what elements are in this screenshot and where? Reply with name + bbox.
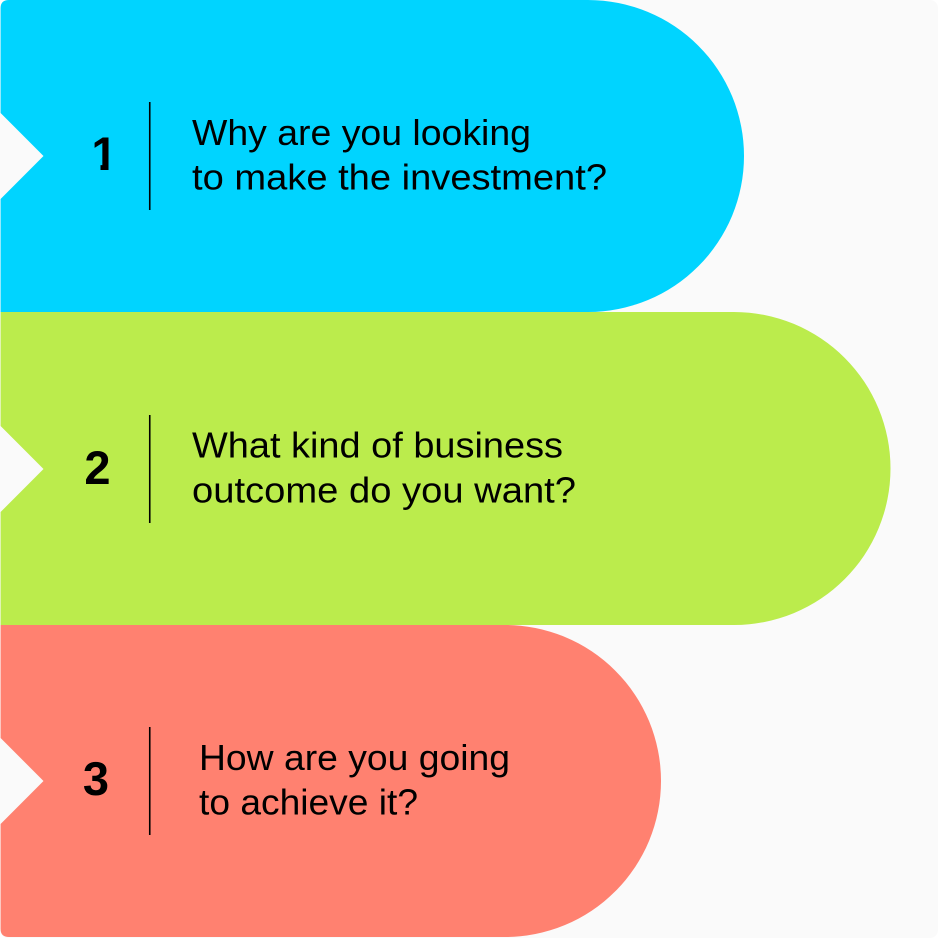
question 1: [192, 112, 607, 198]
coral band with notch: [1, 625, 661, 937]
question 2: What kind of business: [192, 424, 563, 466]
number 3: 3: [83, 752, 109, 805]
question 2: outcome do you want?: [192, 470, 576, 510]
panel: step 2: [1, 312, 891, 625]
panel: step 3: [1, 625, 661, 937]
question 1: to make the investment?: [192, 156, 607, 198]
panel: step 1: [1, 0, 744, 312]
question 3: to achieve it?: [199, 782, 418, 822]
number 2: 2: [84, 441, 111, 494]
question 3: How are you going: [199, 737, 510, 778]
question 3: [199, 737, 510, 822]
blue band with notch: [1, 0, 744, 312]
question 2: [192, 424, 576, 510]
number 1: 1: [91, 127, 118, 180]
question 1: Why are you looking: [192, 112, 531, 153]
green band with notch: [1, 312, 891, 625]
